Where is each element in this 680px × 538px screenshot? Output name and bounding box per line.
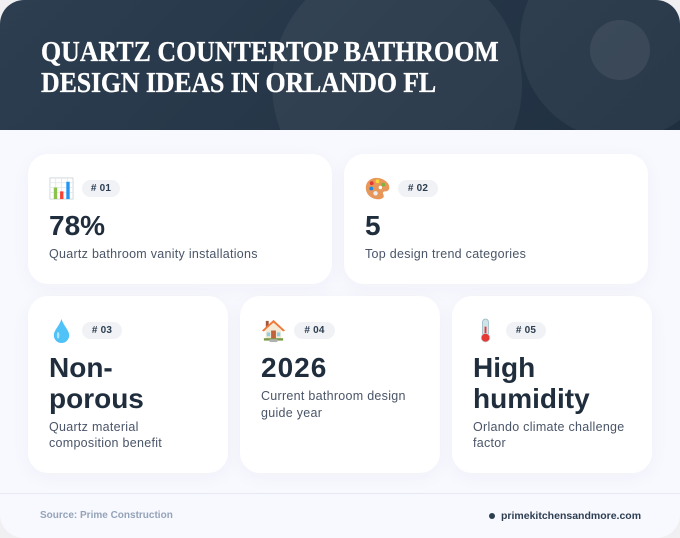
- description: [261, 389, 406, 420]
- badge: # 02: [408, 183, 428, 194]
- description: composition benefit: [49, 436, 162, 450]
- value: High: [473, 352, 535, 383]
- description: Quartz bathroom vanity installations: [49, 247, 258, 261]
- description: Quartz material: [49, 420, 139, 434]
- value: porous: [49, 383, 144, 414]
- icon: water drop: [54, 319, 70, 343]
- value: humidity: [473, 383, 590, 414]
- badge: [82, 180, 120, 197]
- title: [41, 37, 499, 99]
- icon: thermometer: [480, 318, 490, 342]
- icon: bar chart: [50, 178, 74, 200]
- value: [473, 352, 590, 414]
- header banner: [0, 0, 680, 130]
- description: factor: [473, 436, 506, 450]
- panel: stat 05: [452, 296, 652, 473]
- description: guide year: [261, 406, 322, 420]
- value: 5: [365, 210, 381, 241]
- panel: stat 02: [344, 154, 648, 284]
- source note: Source: Prime Construction: [40, 510, 173, 521]
- badge: # 04: [304, 325, 325, 336]
- badge: # 03: [92, 325, 112, 336]
- website: primekitchensandmore.com: [501, 510, 641, 522]
- panel: stat 04: [240, 296, 440, 473]
- description: Top design trend categories: [365, 247, 526, 261]
- value: 78%: [49, 210, 105, 241]
- description: [49, 420, 162, 450]
- icon: palette: [366, 178, 390, 200]
- panel: stat 03: [28, 296, 228, 473]
- description: Current bathroom design: [261, 389, 406, 403]
- description: Orlando climate challenge: [473, 420, 625, 434]
- value: 2026: [261, 352, 327, 383]
- panel: stat 01: [28, 154, 332, 284]
- badge: # 01: [91, 183, 111, 194]
- description: [473, 420, 625, 450]
- icon: house: [262, 320, 285, 342]
- title: DESIGN IDEAS IN ORLANDO FL: [41, 68, 436, 99]
- badge: # 05: [516, 325, 536, 336]
- value: Non-: [49, 352, 113, 383]
- badge: [398, 180, 438, 197]
- value: [49, 352, 144, 414]
- badge: [82, 322, 122, 339]
- badge: [506, 322, 546, 339]
- footer: [0, 493, 680, 538]
- badge: [294, 322, 335, 339]
- title: QUARTZ COUNTERTOP BATHROOM: [41, 37, 499, 68]
